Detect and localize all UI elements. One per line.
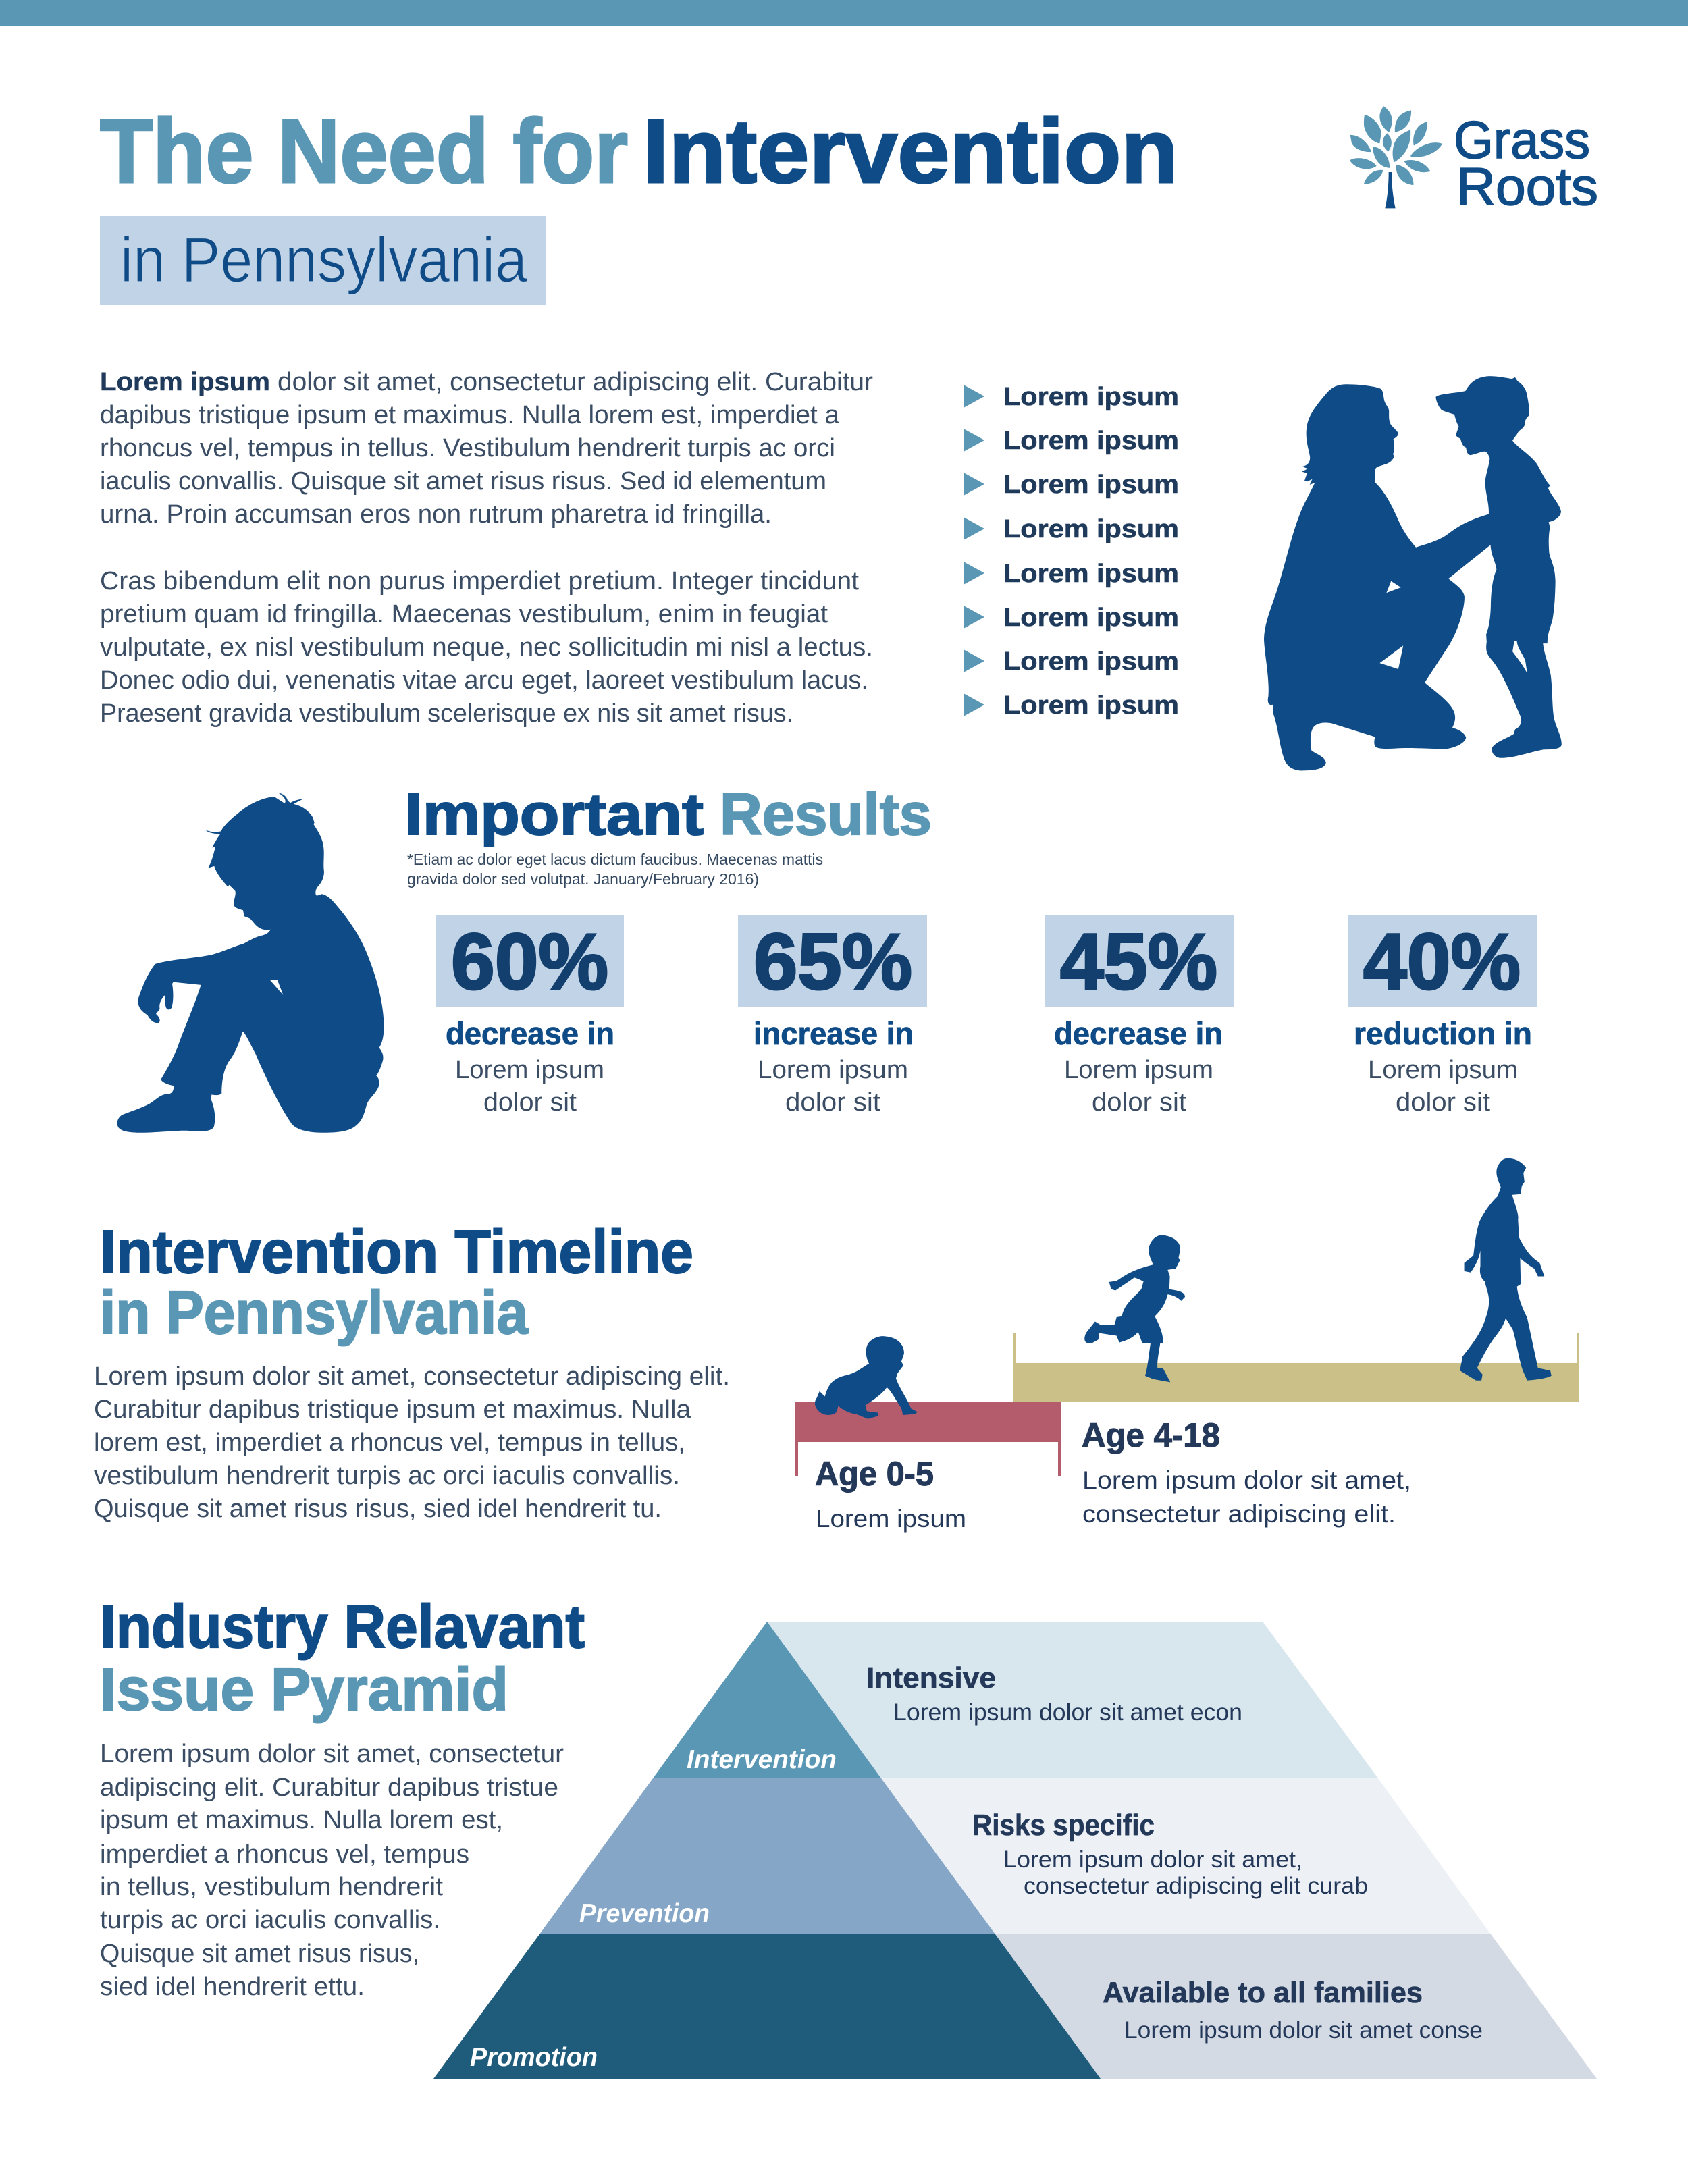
icon: walking teen xyxy=(1460,1158,1552,1381)
logo: Grass Roots: Grass xyxy=(1454,110,1590,169)
timeline paragraph: vestibulum hendrerit turpis ac orci iaculis convallis. xyxy=(94,1462,680,1490)
intro paragraph 1 xyxy=(100,368,873,529)
pyramid tier: promotion: Available to all families xyxy=(1103,1976,1423,2009)
stat: 45% decrease: 45% xyxy=(1060,917,1217,1007)
timeline bar: age 4-18 xyxy=(1013,1333,1579,1402)
intro paragraph 2: Donec odio dui, venenatis vitae arcu eget, laoreet vestibulum lacus. xyxy=(100,666,868,695)
pyramid paragraph: Lorem ipsum dolor sit amet, consectetur xyxy=(100,1740,564,1768)
pyramid paragraph xyxy=(100,1740,564,2001)
heading: Intervention Timeline: in Pennsylvania xyxy=(100,1279,529,1347)
pyramid paragraph: ipsum et maximus. Nulla lorem est, xyxy=(100,1806,503,1834)
heading: Industry Relavant Issue Pyramid: Issue Pyramid xyxy=(100,1656,508,1724)
stat: 60% decrease xyxy=(436,915,624,1117)
footnote: gravida dolor sed volutpat. January/February 2016) xyxy=(407,870,759,888)
intro paragraph 1: Lorem ipsum xyxy=(100,368,270,396)
stat: 40% reduction xyxy=(1348,915,1537,1117)
bullet list: Lorem ipsum xyxy=(1003,427,1179,455)
bullet list: Lorem ipsum xyxy=(1003,604,1179,632)
intro paragraph 2 xyxy=(100,567,873,728)
pyramid tier: promotion: Promotion xyxy=(470,2043,598,2072)
intro paragraph 1: urna. Proin accumsan eros non rutrum pharetra id fringilla. xyxy=(100,500,772,529)
logo: Grass Roots xyxy=(1350,107,1598,216)
pyramid paragraph: imperdiet a rhoncus vel, tempus xyxy=(100,1840,469,1869)
stat: 65% increase: dolor sit xyxy=(785,1088,880,1117)
timeline paragraph: Quisque sit amet risus risus, sied idel hendrerit tu. xyxy=(94,1495,662,1523)
stat: 60% decrease: dolor sit xyxy=(483,1088,577,1117)
stat: 60% decrease: decrease in xyxy=(446,1015,614,1051)
pyramid tier: prevention: consectetur adipiscing elit curab xyxy=(1024,1873,1368,1899)
label: Age 4-18: consectetur adipiscing elit. xyxy=(1082,1500,1396,1528)
pyramid paragraph: in tellus, vestibulum hendrerit xyxy=(100,1873,443,1901)
footnote: *Etiam ac dolor eget lacus dictum faucibus. Maecenas mattis xyxy=(407,851,823,868)
label: Age 0-5 xyxy=(815,1455,966,1533)
bullet list: Lorem ipsum xyxy=(1003,560,1179,588)
footnote xyxy=(407,851,823,888)
intro paragraph 1: iaculis convallis. Quisque sit amet risus risus. Sed id elementum xyxy=(100,467,826,496)
intro paragraph 1: rhoncus vel, tempus in tellus. Vestibulum hendrerit turpis ac orci xyxy=(100,434,835,462)
bullet list: Lorem ipsum xyxy=(1003,691,1179,720)
icon: mother and child silhouette xyxy=(1264,376,1562,770)
label: Age 4-18: Age 4-18 xyxy=(1082,1416,1220,1454)
bullet list: Lorem ipsum xyxy=(1003,647,1179,676)
bullet list xyxy=(964,383,1179,720)
timeline paragraph: Lorem ipsum dolor sit amet, consectetur adipiscing elit. xyxy=(94,1362,730,1391)
timeline paragraph: lorem est, imperdiet a rhoncus vel, tempus in tellus, xyxy=(94,1429,685,1457)
stat: 40% reduction: Lorem ipsum xyxy=(1368,1056,1518,1084)
heading: Intervention Timeline xyxy=(100,1219,693,1347)
label: Age 4-18: Lorem ipsum dolor sit amet, xyxy=(1082,1466,1411,1494)
intro paragraph 2: Cras bibendum elit non purus imperdiet pretium. Integer tincidunt xyxy=(100,567,859,595)
title: The Need for xyxy=(100,101,628,202)
heading: Industry Relavant Issue Pyramid: Industry Relavant xyxy=(100,1593,585,1661)
label: Age 0-5: Age 0-5 xyxy=(815,1455,934,1493)
stat: 60% decrease: Lorem ipsum xyxy=(455,1056,604,1084)
stat: 45% decrease: Lorem ipsum xyxy=(1064,1056,1213,1084)
icon: seated boy silhouette xyxy=(117,793,384,1133)
pyramid tier: intervention: Intervention xyxy=(687,1745,837,1774)
stat: 45% decrease xyxy=(1045,915,1234,1117)
intro paragraph 1: dolor sit amet, consectetur adipiscing elit. Curabitur xyxy=(278,368,873,396)
bullet list: Lorem ipsum xyxy=(1003,515,1179,543)
pyramid tier: promotion xyxy=(433,1934,1597,2079)
stat: 65% increase: 65% xyxy=(754,917,912,1007)
stat: 60% decrease: 60% xyxy=(451,917,608,1007)
logo: Grass Roots: Roots xyxy=(1456,157,1598,216)
subtitle: in Pennsylvania: in Pennsylvania xyxy=(120,224,528,295)
icon: crawling baby xyxy=(815,1336,918,1419)
timeline paragraph xyxy=(94,1362,730,1523)
title: Intervention xyxy=(643,101,1178,202)
intro paragraph 1: dapibus tristique ipsum et maximus. Nulla lorem est, imperdiet a xyxy=(100,401,840,429)
pyramid tier: intervention: Intensive xyxy=(866,1661,996,1695)
heading: Intervention Timeline: Intervention Timeline xyxy=(100,1219,693,1286)
pyramid tier: prevention: Risks specific xyxy=(972,1809,1155,1842)
pyramid paragraph: turpis ac orci iaculis convallis. xyxy=(100,1906,440,1934)
intro paragraph 2: vulputate, ex nisl vestibulum neque, nec sollicitudin mi nisl a lectus. xyxy=(100,633,873,662)
stat: 40% reduction: reduction in xyxy=(1354,1015,1532,1051)
pyramid tier: prevention xyxy=(539,1778,1491,1934)
title xyxy=(100,101,1178,202)
bullet list: Lorem ipsum xyxy=(1003,383,1179,411)
stat: 45% decrease: decrease in xyxy=(1054,1015,1223,1051)
pyramid tier: promotion: Lorem ipsum dolor sit amet conse xyxy=(1124,2017,1483,2044)
stat: 65% increase: increase in xyxy=(754,1015,914,1051)
pyramid paragraph: adipiscing elit. Curabitur dapibus tristue xyxy=(100,1774,558,1802)
stat: 65% increase xyxy=(738,915,927,1117)
heading: Important Results: Results xyxy=(720,782,932,847)
icon: running child xyxy=(1084,1235,1185,1382)
pyramid paragraph: sied idel hendrerit ettu. xyxy=(100,1973,365,2001)
timeline paragraph: Curabitur dapibus tristique ipsum et maximus. Nulla xyxy=(94,1395,691,1424)
icon: tree xyxy=(1350,107,1442,208)
heading: Important Results: Important xyxy=(404,782,704,847)
heading: Industry Relavant Issue Pyramid xyxy=(100,1593,585,1724)
top bar xyxy=(0,0,1688,26)
stat: 65% increase: Lorem ipsum xyxy=(758,1056,908,1084)
label: Age 4-18 xyxy=(1082,1416,1411,1528)
stat: 40% reduction: 40% xyxy=(1363,917,1521,1007)
stat: 40% reduction: dolor sit xyxy=(1396,1088,1490,1117)
pyramid tier: intervention xyxy=(653,1622,1378,1778)
intro paragraph 2: pretium quam id fringilla. Maecenas vestibulum, enim in feugiat xyxy=(100,600,828,629)
pyramid tier: prevention: Prevention xyxy=(579,1899,710,1928)
bullet list: Lorem ipsum xyxy=(1003,471,1179,499)
heading: Important Results xyxy=(404,782,932,847)
pyramid paragraph: Quisque sit amet risus risus, xyxy=(100,1940,419,1968)
label: Age 0-5: Lorem ipsum xyxy=(816,1505,966,1533)
pyramid tier: prevention: Lorem ipsum dolor sit amet, xyxy=(1003,1846,1302,1873)
stat: 45% decrease: dolor sit xyxy=(1092,1088,1186,1117)
intro paragraph 2: Praesent gravida vestibulum scelerisque ex nis sit amet risus. xyxy=(100,699,793,728)
timeline bar: age 0-5 xyxy=(795,1402,1061,1476)
pyramid tier: intervention: Lorem ipsum dolor sit amet econ xyxy=(893,1699,1242,1726)
